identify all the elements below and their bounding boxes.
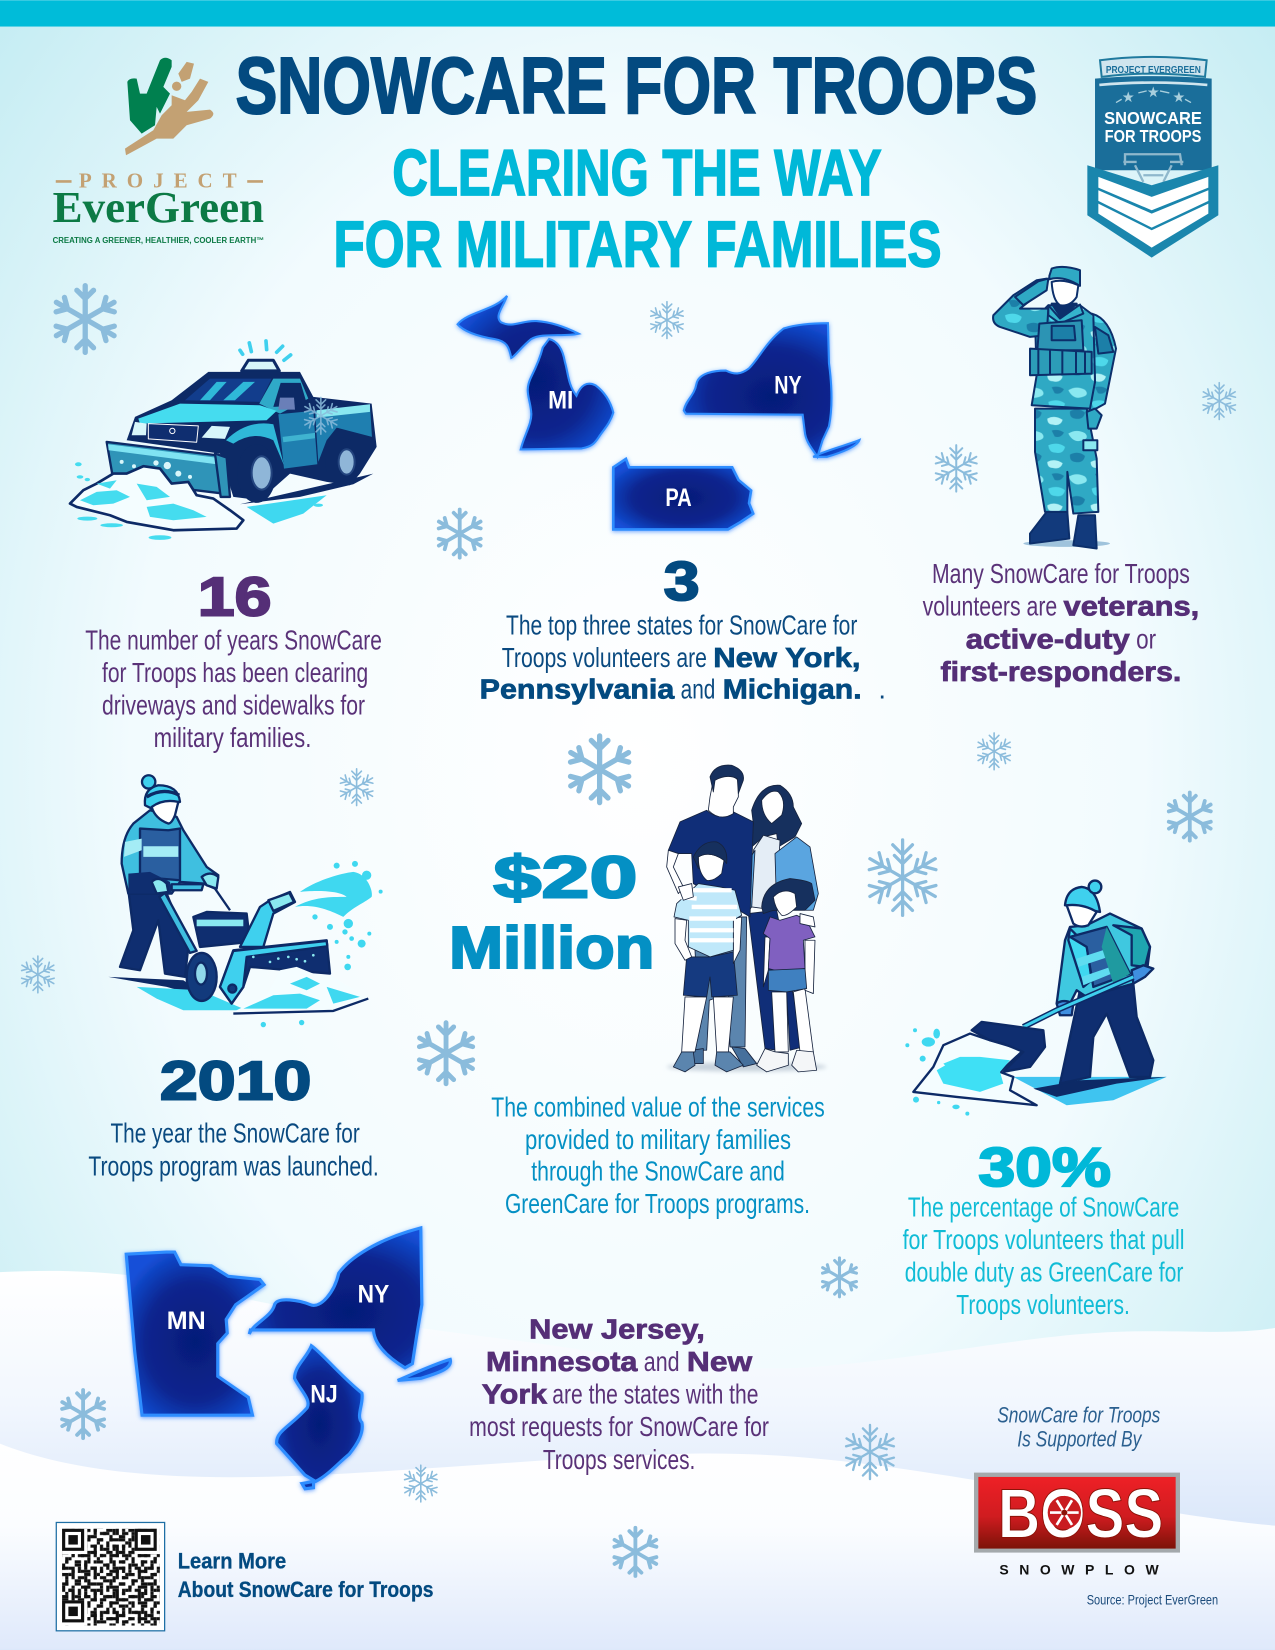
stat: 30%: double duty as GreenCare for <box>905 1257 1183 1288</box>
state: New Jersey: NJ <box>310 1381 338 1409</box>
badge: Snowcare for Troops: ★ <box>1147 85 1160 101</box>
subtitle: CLEARING THE WAY <box>392 136 882 209</box>
state: Minnesota: MN <box>167 1307 206 1335</box>
badge: Snowcare for Troops: ★ <box>1172 90 1186 106</box>
QR code <box>56 1522 165 1631</box>
stat: veterans text: volunteers are <box>923 591 1057 622</box>
badge: Snowcare for Troops: FOR TROOPS <box>1105 126 1201 146</box>
text: most requests: are the states with the <box>552 1379 758 1410</box>
learn more link text: About SnowCare for Troops <box>178 1577 433 1602</box>
stat: veterans text: Many SnowCare for Troops <box>932 558 1190 589</box>
text: most requests <box>469 1313 769 1475</box>
stat: 3 states: New York, <box>713 642 861 673</box>
stat: $20 Million <box>449 846 654 981</box>
stat: veterans text: active-duty <box>966 623 1131 654</box>
illustration: snowplow truck <box>70 341 377 540</box>
learn more link text <box>178 1549 433 1602</box>
logo tagline: CREATING A GREENER, HEALTHIER, COOLER EARTH™ <box>53 235 264 245</box>
logo: BOSS snowplow <box>974 1473 1180 1578</box>
state: Michigan: MI <box>548 386 573 414</box>
state: New Jersey <box>277 1346 362 1489</box>
source: Source: Project EverGreen <box>1087 1593 1218 1608</box>
stat: 3 states: Pennsylvania <box>480 674 675 705</box>
stat: 2010 <box>88 1050 379 1181</box>
text: most requests: Troops services. <box>543 1444 695 1475</box>
state: Pennsylvania <box>613 459 753 529</box>
stat: 2010: The year the SnowCare for <box>110 1118 360 1149</box>
stat: 3 states: The top three states for SnowCare for <box>506 610 857 641</box>
text: combined value: provided to military families <box>525 1124 791 1155</box>
text: most requests: York <box>482 1379 548 1410</box>
text: most requests: New Jersey, <box>529 1313 705 1344</box>
stat: 16 years: for Troops has been clearing <box>102 657 368 688</box>
stat: $20 Million: $20 <box>493 846 638 911</box>
snowflakes <box>20 286 1238 1576</box>
state: New York lower: NY <box>358 1281 389 1309</box>
text: combined value: The combined value of the services <box>491 1091 825 1122</box>
stat: 16 years: The number of years SnowCare <box>85 624 382 655</box>
stat: 30%: The percentage of SnowCare <box>908 1191 1179 1222</box>
badge: Snowcare for Troops <box>1087 57 1218 258</box>
icon: handprint <box>125 58 213 155</box>
text: most requests: New <box>687 1346 753 1377</box>
logo: Project EverGreen <box>53 58 264 245</box>
sponsor text: SnowCare for Troops <box>997 1403 1160 1428</box>
stat: veterans text: or <box>1136 623 1156 654</box>
PROJECT wordmark: PROJECT <box>79 169 237 193</box>
stat: 16 years: military families. <box>154 722 311 753</box>
sponsor text: Is Supported By <box>1017 1427 1143 1452</box>
stat: 30%: Troops volunteers. <box>956 1289 1130 1320</box>
snow hills <box>0 1271 1275 1650</box>
state: Pennsylvania: PA <box>665 484 692 512</box>
text: combined value: GreenCare for Troops programs. <box>505 1188 810 1219</box>
stat: 3 states: Troops volunteers are <box>502 642 707 673</box>
text: most requests: Minnesota <box>486 1346 638 1377</box>
state: New York: NY <box>774 372 802 400</box>
stat: 3 states: 3 <box>664 550 700 612</box>
stat: 3 states: Michigan. <box>723 674 862 705</box>
logo: BOSS snowplow: BOSS <box>998 1475 1163 1553</box>
badge: Snowcare for Troops: PROJECT EVERGREEN <box>1106 65 1201 76</box>
text: most requests: most requests for SnowCare for <box>469 1411 769 1442</box>
state: New York <box>684 323 859 457</box>
state: New York lower <box>249 1228 451 1380</box>
stat: 2010: 2010 <box>160 1050 311 1112</box>
state: Minnesota <box>126 1252 264 1415</box>
stat: 30%: 30% <box>978 1136 1111 1198</box>
stat: 16 years: driveways and sidewalks for <box>102 690 365 721</box>
text: combined value: through the SnowCare and <box>531 1156 785 1187</box>
illustration: saluting soldier <box>993 267 1116 549</box>
stat: 3 states: . <box>878 674 886 705</box>
text: combined value <box>491 1091 825 1219</box>
stat: veterans text: first-responders. <box>940 656 1181 687</box>
top band <box>0 0 1275 27</box>
illustration: small flake on truck <box>303 397 339 434</box>
stat: veterans text: veterans, <box>1064 591 1199 622</box>
text: most requests: and <box>644 1346 680 1377</box>
stat: 16 years <box>85 566 382 753</box>
sponsor text <box>997 1403 1160 1452</box>
logo: BOSS snowplow: SNOWPLOW <box>999 1562 1159 1578</box>
illustration: family <box>667 765 827 1072</box>
stat: 3 states <box>480 550 886 705</box>
title: SNOWCARE FOR TROOPS <box>236 41 1037 130</box>
badge: Snowcare for Troops: SNOWCARE <box>1104 108 1202 128</box>
stat: veterans text <box>923 558 1199 687</box>
stat: 2010: Troops program was launched. <box>88 1150 379 1181</box>
stat: $20 Million: Million <box>449 916 654 981</box>
stat: 16 years: 16 <box>198 566 271 628</box>
stat: 30%: for Troops volunteers that pull <box>903 1224 1185 1255</box>
EverGreen wordmark: EverGreen <box>53 183 264 232</box>
illustration: snowblower operator <box>108 775 383 1027</box>
subtitle <box>333 136 942 280</box>
illustration: man shoveling <box>905 881 1167 1116</box>
learn more link text: Learn More <box>178 1549 286 1574</box>
badge: Snowcare for Troops: ★ <box>1122 90 1135 106</box>
stat: 3 states: and <box>681 674 715 705</box>
state: Michigan <box>458 296 613 449</box>
subtitle: FOR MILITARY FAMILIES <box>333 207 942 280</box>
stat: 30% <box>903 1136 1185 1320</box>
